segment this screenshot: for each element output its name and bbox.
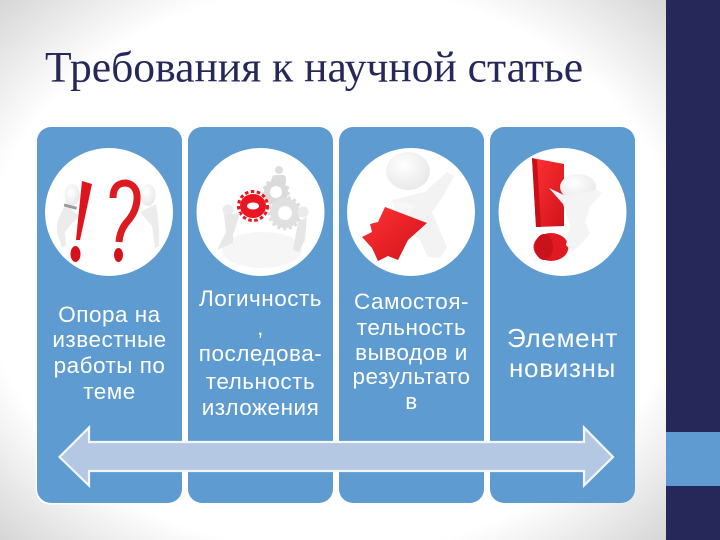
arrow: double-headed xyxy=(60,428,613,486)
icon: exclamation and question marks xyxy=(45,148,173,276)
text: known works: работы по xyxy=(54,353,165,378)
panel: independence xyxy=(339,127,484,503)
panel: known works xyxy=(36,126,184,504)
sidebar xyxy=(666,0,720,540)
text: known works: теме xyxy=(83,379,136,404)
text: known works: известные xyxy=(52,327,167,352)
text: logic and sequence: изложения xyxy=(202,395,319,420)
panel: logic and sequence xyxy=(188,127,333,503)
text: independence: в xyxy=(405,389,418,414)
text: independence: Самостоя- xyxy=(354,289,469,314)
text: independence: тельность xyxy=(357,315,466,340)
text: logic and sequence: Логичность xyxy=(199,286,322,311)
panel: novelty xyxy=(490,127,635,503)
text: logic and sequence: , xyxy=(257,315,264,340)
title: Требования к научной статье xyxy=(45,44,583,92)
text: independence: выводов и xyxy=(355,340,468,365)
icon: person with puzzle piece xyxy=(347,148,475,276)
text: logic and sequence: последова- xyxy=(199,341,322,366)
text: logic and sequence: тельность xyxy=(206,369,315,394)
text: known works: Опора на xyxy=(58,302,161,327)
text: novelty: новизны xyxy=(509,353,616,383)
icon: people with gears xyxy=(196,148,324,276)
text: novelty: Элемент xyxy=(507,323,618,353)
icon: person with exclamation mark xyxy=(498,148,626,276)
text: independence: результато xyxy=(352,364,471,389)
